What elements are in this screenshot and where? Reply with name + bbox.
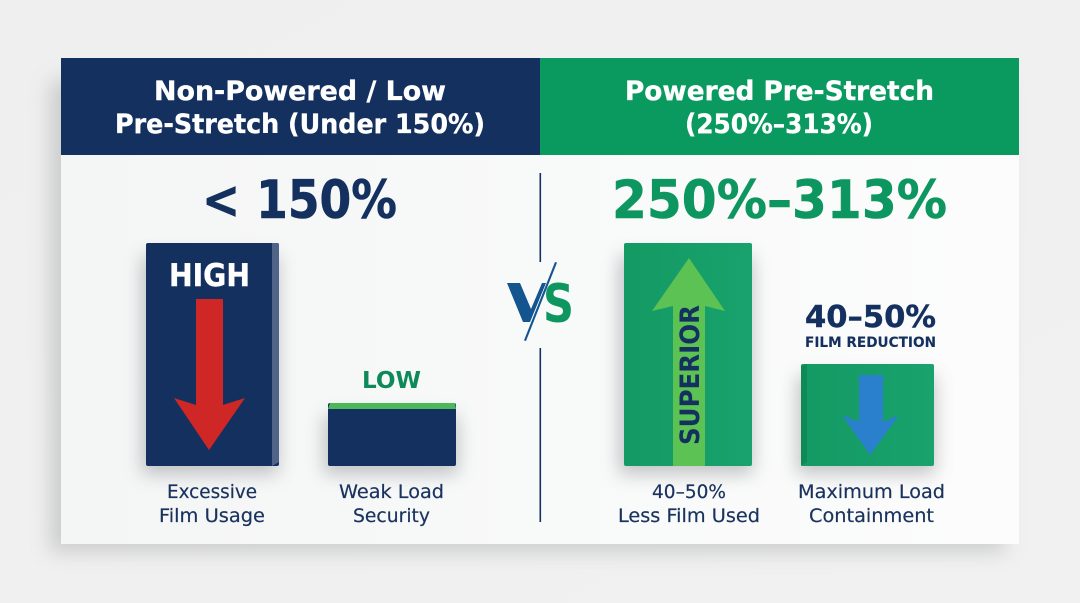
bar: excessive film usage — [142, 243, 279, 474]
header: non-powered: Pre-Stretch (Under 150%) — [115, 109, 485, 140]
card shadow — [50, 80, 1005, 552]
caption: maximum load containment: Maximum Load — [798, 481, 945, 503]
caption: weak load security — [339, 481, 444, 527]
label: LOW: LOW — [362, 368, 421, 394]
callout: 40–50% film reduction: FILM REDUCTION — [805, 335, 936, 351]
big value: under 150%: < 150% — [202, 170, 397, 231]
VS badge — [507, 262, 574, 341]
icon: red down arrow — [174, 299, 245, 450]
header: non-powered — [61, 58, 540, 155]
caption: maximum load containment — [798, 481, 945, 527]
bar: less film used — [619, 243, 753, 474]
header: powered: Powered Pre-Stretch — [625, 76, 934, 107]
caption: excessive film usage: Film Usage — [159, 505, 265, 527]
bar top: green strip — [328, 403, 456, 409]
label: HIGH: HIGH — [169, 258, 250, 294]
VS badge: S — [543, 274, 574, 335]
header: powered — [540, 58, 1019, 155]
icon: blue down arrow — [842, 375, 899, 455]
center divider — [540, 173, 541, 522]
caption: weak load security: Weak Load — [339, 481, 444, 503]
caption: maximum load containment: Containment — [809, 505, 934, 527]
bar: weak load security — [324, 403, 458, 474]
caption: weak load security: Security — [353, 505, 430, 527]
callout: 40–50% film reduction — [805, 300, 936, 351]
header: powered: (250%–313%) — [685, 109, 873, 140]
label: SUPERIOR: SUPERIOR — [675, 305, 706, 445]
caption: less film used: Less Film Used — [618, 505, 760, 527]
callout: 40–50% film reduction: 40–50% — [805, 300, 936, 335]
icon: light green up arrow — [652, 258, 725, 466]
big value: 250–313%: 250%–313% — [612, 170, 947, 231]
caption: less film used — [618, 481, 760, 527]
caption: excessive film usage — [159, 481, 265, 527]
caption: excessive film usage: Excessive — [167, 481, 257, 503]
card panel — [61, 58, 1019, 544]
header: non-powered: Non-Powered / Low — [154, 76, 446, 107]
bar: maximum load containment — [797, 364, 935, 474]
caption: less film used: 40–50% — [652, 481, 726, 503]
